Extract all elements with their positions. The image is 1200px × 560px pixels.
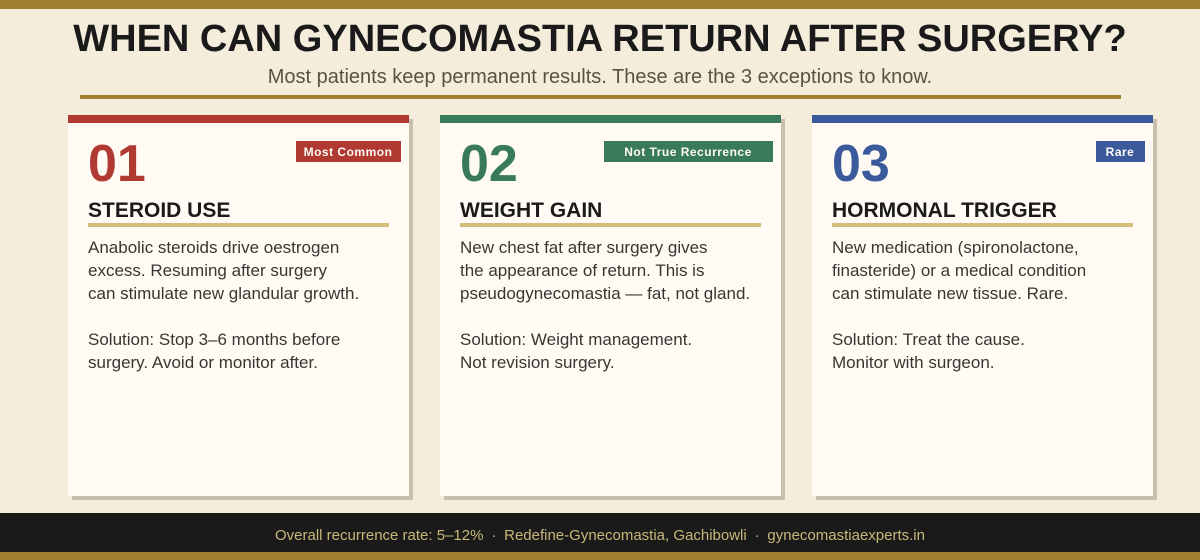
badge xyxy=(1096,141,1145,162)
title: WHEN CAN GYNECOMASTIA RETURN AFTER SURGERY? xyxy=(73,18,1127,60)
heading underline xyxy=(88,223,389,227)
badge: Rare xyxy=(1106,145,1134,159)
panel: weight gain xyxy=(440,115,781,496)
footer text: Overall recurrence rate: 5–12% · Redefine-Gynecomastia, Gachibowli · gynecomastiaexperts.in xyxy=(275,527,925,544)
card heading: WEIGHT GAIN xyxy=(460,199,602,222)
number: 02 xyxy=(460,135,518,193)
top accent bar xyxy=(0,0,1200,9)
card top bar xyxy=(812,115,1153,123)
footer band xyxy=(0,513,1200,552)
subtitle: Most patients keep permanent results. These are the 3 exceptions to know. xyxy=(268,66,932,88)
badge xyxy=(604,141,773,162)
badge xyxy=(296,141,401,162)
card top bar xyxy=(68,115,409,123)
header rule xyxy=(80,95,1121,99)
body text: Anabolic steroids drive oestrogen excess. Resuming after surgery can stimulate new glandular growth. Solution: Stop 3–6 months before surgery. Avoid or monitor after. xyxy=(88,238,359,372)
card heading: STEROID USE xyxy=(88,199,230,222)
panel: steroid use xyxy=(68,115,409,496)
panel: hormonal trigger xyxy=(812,115,1153,496)
number: 03 xyxy=(832,135,890,193)
card top bar xyxy=(440,115,781,123)
card heading: HORMONAL TRIGGER xyxy=(832,199,1057,222)
badge: Not True Recurrence xyxy=(624,145,752,159)
bottom accent bar xyxy=(0,552,1200,560)
heading underline xyxy=(832,223,1133,227)
badge: Most Common xyxy=(304,145,392,159)
heading underline xyxy=(460,223,761,227)
body text: New medication (spironolactone, finasteride) or a medical condition can stimulate new tissue. Rare. Solution: Treat the cause. Monitor with surgeon. xyxy=(832,238,1086,372)
body text: New chest fat after surgery gives the appearance of return. This is pseudogynecomastia — fat, not gland. Solution: Weight management. Not revision surgery. xyxy=(460,238,750,372)
number: 01 xyxy=(88,135,146,193)
